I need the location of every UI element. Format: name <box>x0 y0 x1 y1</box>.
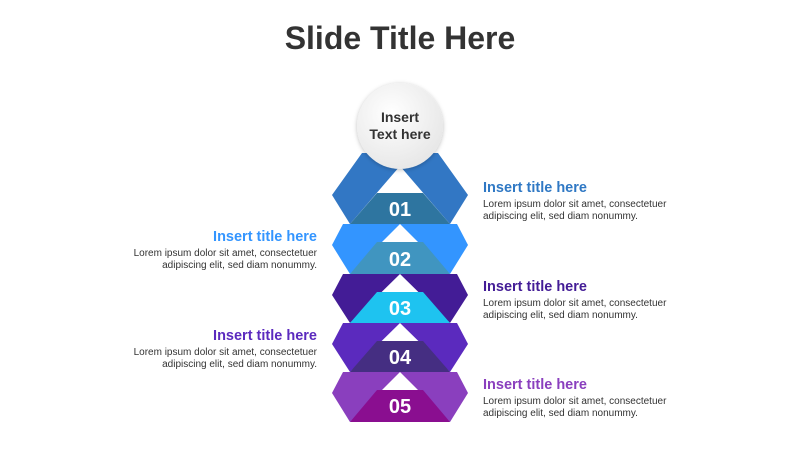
text block 4 <box>134 328 317 370</box>
unit 03 <box>332 274 468 323</box>
text block 2 <box>134 229 317 270</box>
text block 5: Lorem ipsum dolor sit amet, consectetuer <box>483 396 666 407</box>
text block 3: Lorem ipsum dolor sit amet, consectetuer <box>483 298 666 309</box>
circle: insert text <box>357 83 443 169</box>
text block 5: adipiscing elit, sed diam nonummy. <box>483 408 638 418</box>
text block 1 <box>483 180 666 222</box>
text block 5 <box>483 377 666 418</box>
text block 4: adipiscing elit, sed diam nonummy. <box>162 358 317 370</box>
unit 04 <box>332 323 468 372</box>
text block 3: Insert title here <box>483 279 587 295</box>
text block 2: Insert title here <box>213 229 317 245</box>
unit 05: 05 <box>389 396 411 418</box>
unit 01 <box>332 153 468 224</box>
text block 3 <box>483 279 666 320</box>
circle: insert text: Text here <box>369 126 431 142</box>
text block 2: Lorem ipsum dolor sit amet, consectetuer <box>134 248 317 259</box>
unit 05 <box>332 372 468 422</box>
text block 2: adipiscing elit, sed diam nonummy. <box>162 260 317 270</box>
unit 03: 03 <box>389 298 411 320</box>
unit 04: 04 <box>389 347 412 369</box>
title: Slide Title Here <box>285 20 515 56</box>
circle: insert text: Insert <box>381 109 419 125</box>
unit 02: 02 <box>389 249 411 271</box>
unit 02 <box>332 224 468 274</box>
unit 01: 01 <box>389 199 411 221</box>
text block 4: Insert title here <box>213 328 317 344</box>
text block 1: adipiscing elit, sed diam nonummy. <box>483 210 638 222</box>
text block 1: Insert title here <box>483 180 587 196</box>
text block 4: Lorem ipsum dolor sit amet, consectetuer <box>134 347 317 358</box>
text block 1: Lorem ipsum dolor sit amet, consectetuer <box>483 199 666 210</box>
text block 5: Insert title here <box>483 377 587 393</box>
text block 3: adipiscing elit, sed diam nonummy. <box>483 310 638 320</box>
